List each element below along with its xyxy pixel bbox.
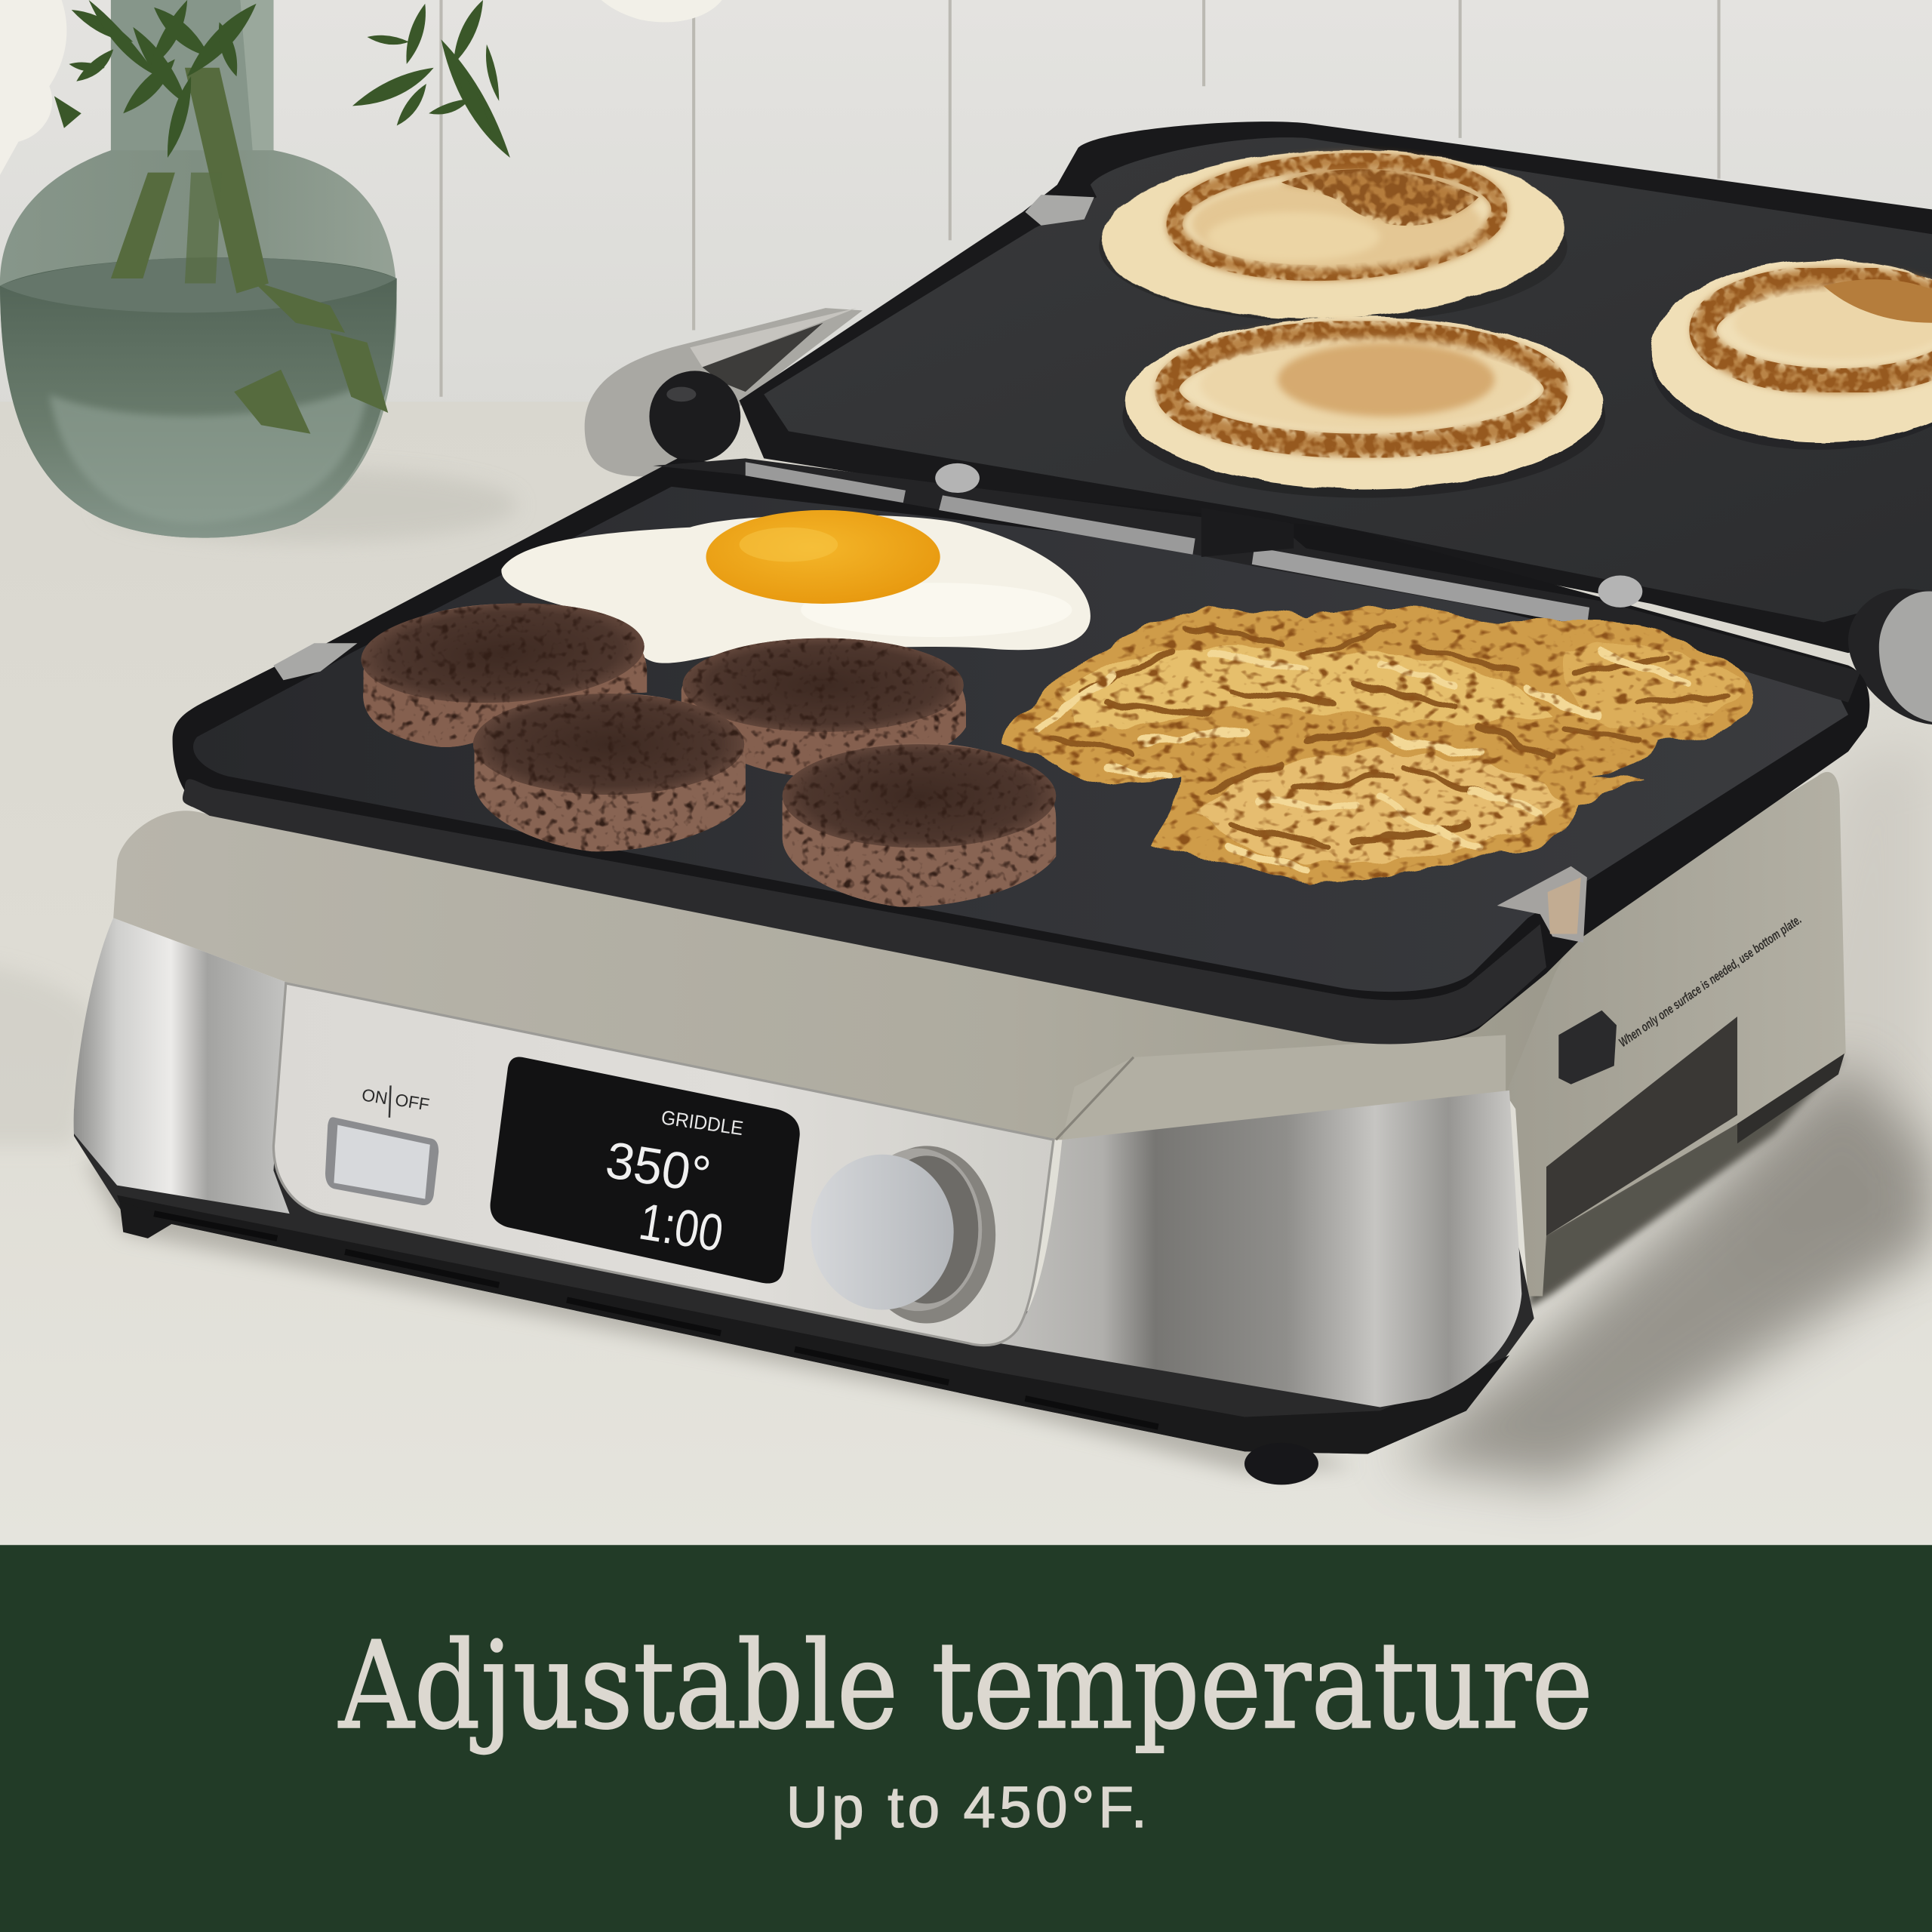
background: paneled wall bbox=[0, 0, 1932, 425]
corner tab: left bbox=[273, 643, 357, 680]
side printed note: When only one surface is needed, use bottom plate. bbox=[1616, 912, 1804, 1050]
digital display: 350° bbox=[602, 1131, 715, 1204]
base: left steel corner bbox=[74, 918, 290, 1214]
on/off label: ON bbox=[361, 1084, 389, 1108]
lower griddle plate bbox=[173, 458, 1869, 1044]
caption band bbox=[0, 1545, 1932, 1932]
sausage patty 1 bbox=[358, 596, 647, 747]
on/off label bbox=[361, 1084, 431, 1118]
on/off label: OFF bbox=[394, 1090, 431, 1115]
right hinge knob bbox=[1848, 589, 1932, 724]
shadow under appliance bbox=[86, 1060, 1932, 1484]
hinge arm: left bbox=[585, 308, 863, 476]
vase shadow on counter bbox=[99, 468, 518, 542]
plate cooking surface bbox=[193, 487, 1848, 992]
temperature dial bbox=[811, 1146, 995, 1323]
glass vase with water bbox=[0, 0, 397, 538]
corner tab: front right bbox=[1497, 866, 1587, 943]
corner tab: upper bbox=[1025, 195, 1094, 226]
hinge strips bbox=[653, 458, 1860, 703]
power button bbox=[325, 1117, 438, 1205]
base: right side panel bbox=[1506, 772, 1846, 1297]
base: dark underside and feet bbox=[74, 1109, 1534, 1484]
subheading: Up to 450°F. bbox=[786, 1776, 1147, 1840]
side slider switch bbox=[1558, 1011, 1617, 1084]
sausage patty 4 bbox=[783, 743, 1056, 907]
control panel bbox=[273, 983, 1054, 1346]
background: countertop bbox=[0, 401, 1932, 1545]
side slot bbox=[1546, 1017, 1737, 1236]
pancake: middle bbox=[1122, 317, 1605, 498]
pancake: top bbox=[1099, 143, 1567, 326]
base: right steel panel bbox=[998, 1091, 1521, 1407]
plate body and edge bbox=[173, 458, 1869, 1042]
headline: Adjustable temperature bbox=[338, 1615, 1593, 1756]
sausage patty 2 bbox=[473, 694, 746, 851]
digital display: 1:00 bbox=[635, 1192, 727, 1263]
digital display: GRIDDLE bbox=[660, 1106, 745, 1140]
sausage patty 3 bbox=[681, 638, 966, 777]
hash browns bbox=[1004, 608, 1752, 884]
flowers and leaves bbox=[0, 0, 722, 175]
shadow under side panel bbox=[1527, 1057, 1844, 1309]
fried egg bbox=[501, 510, 1091, 663]
upper griddle plate with pancakes bbox=[740, 122, 1932, 653]
digital display bbox=[491, 1057, 800, 1284]
pancake: right bbox=[1651, 260, 1932, 450]
base: taupe top band bbox=[113, 811, 1601, 1140]
